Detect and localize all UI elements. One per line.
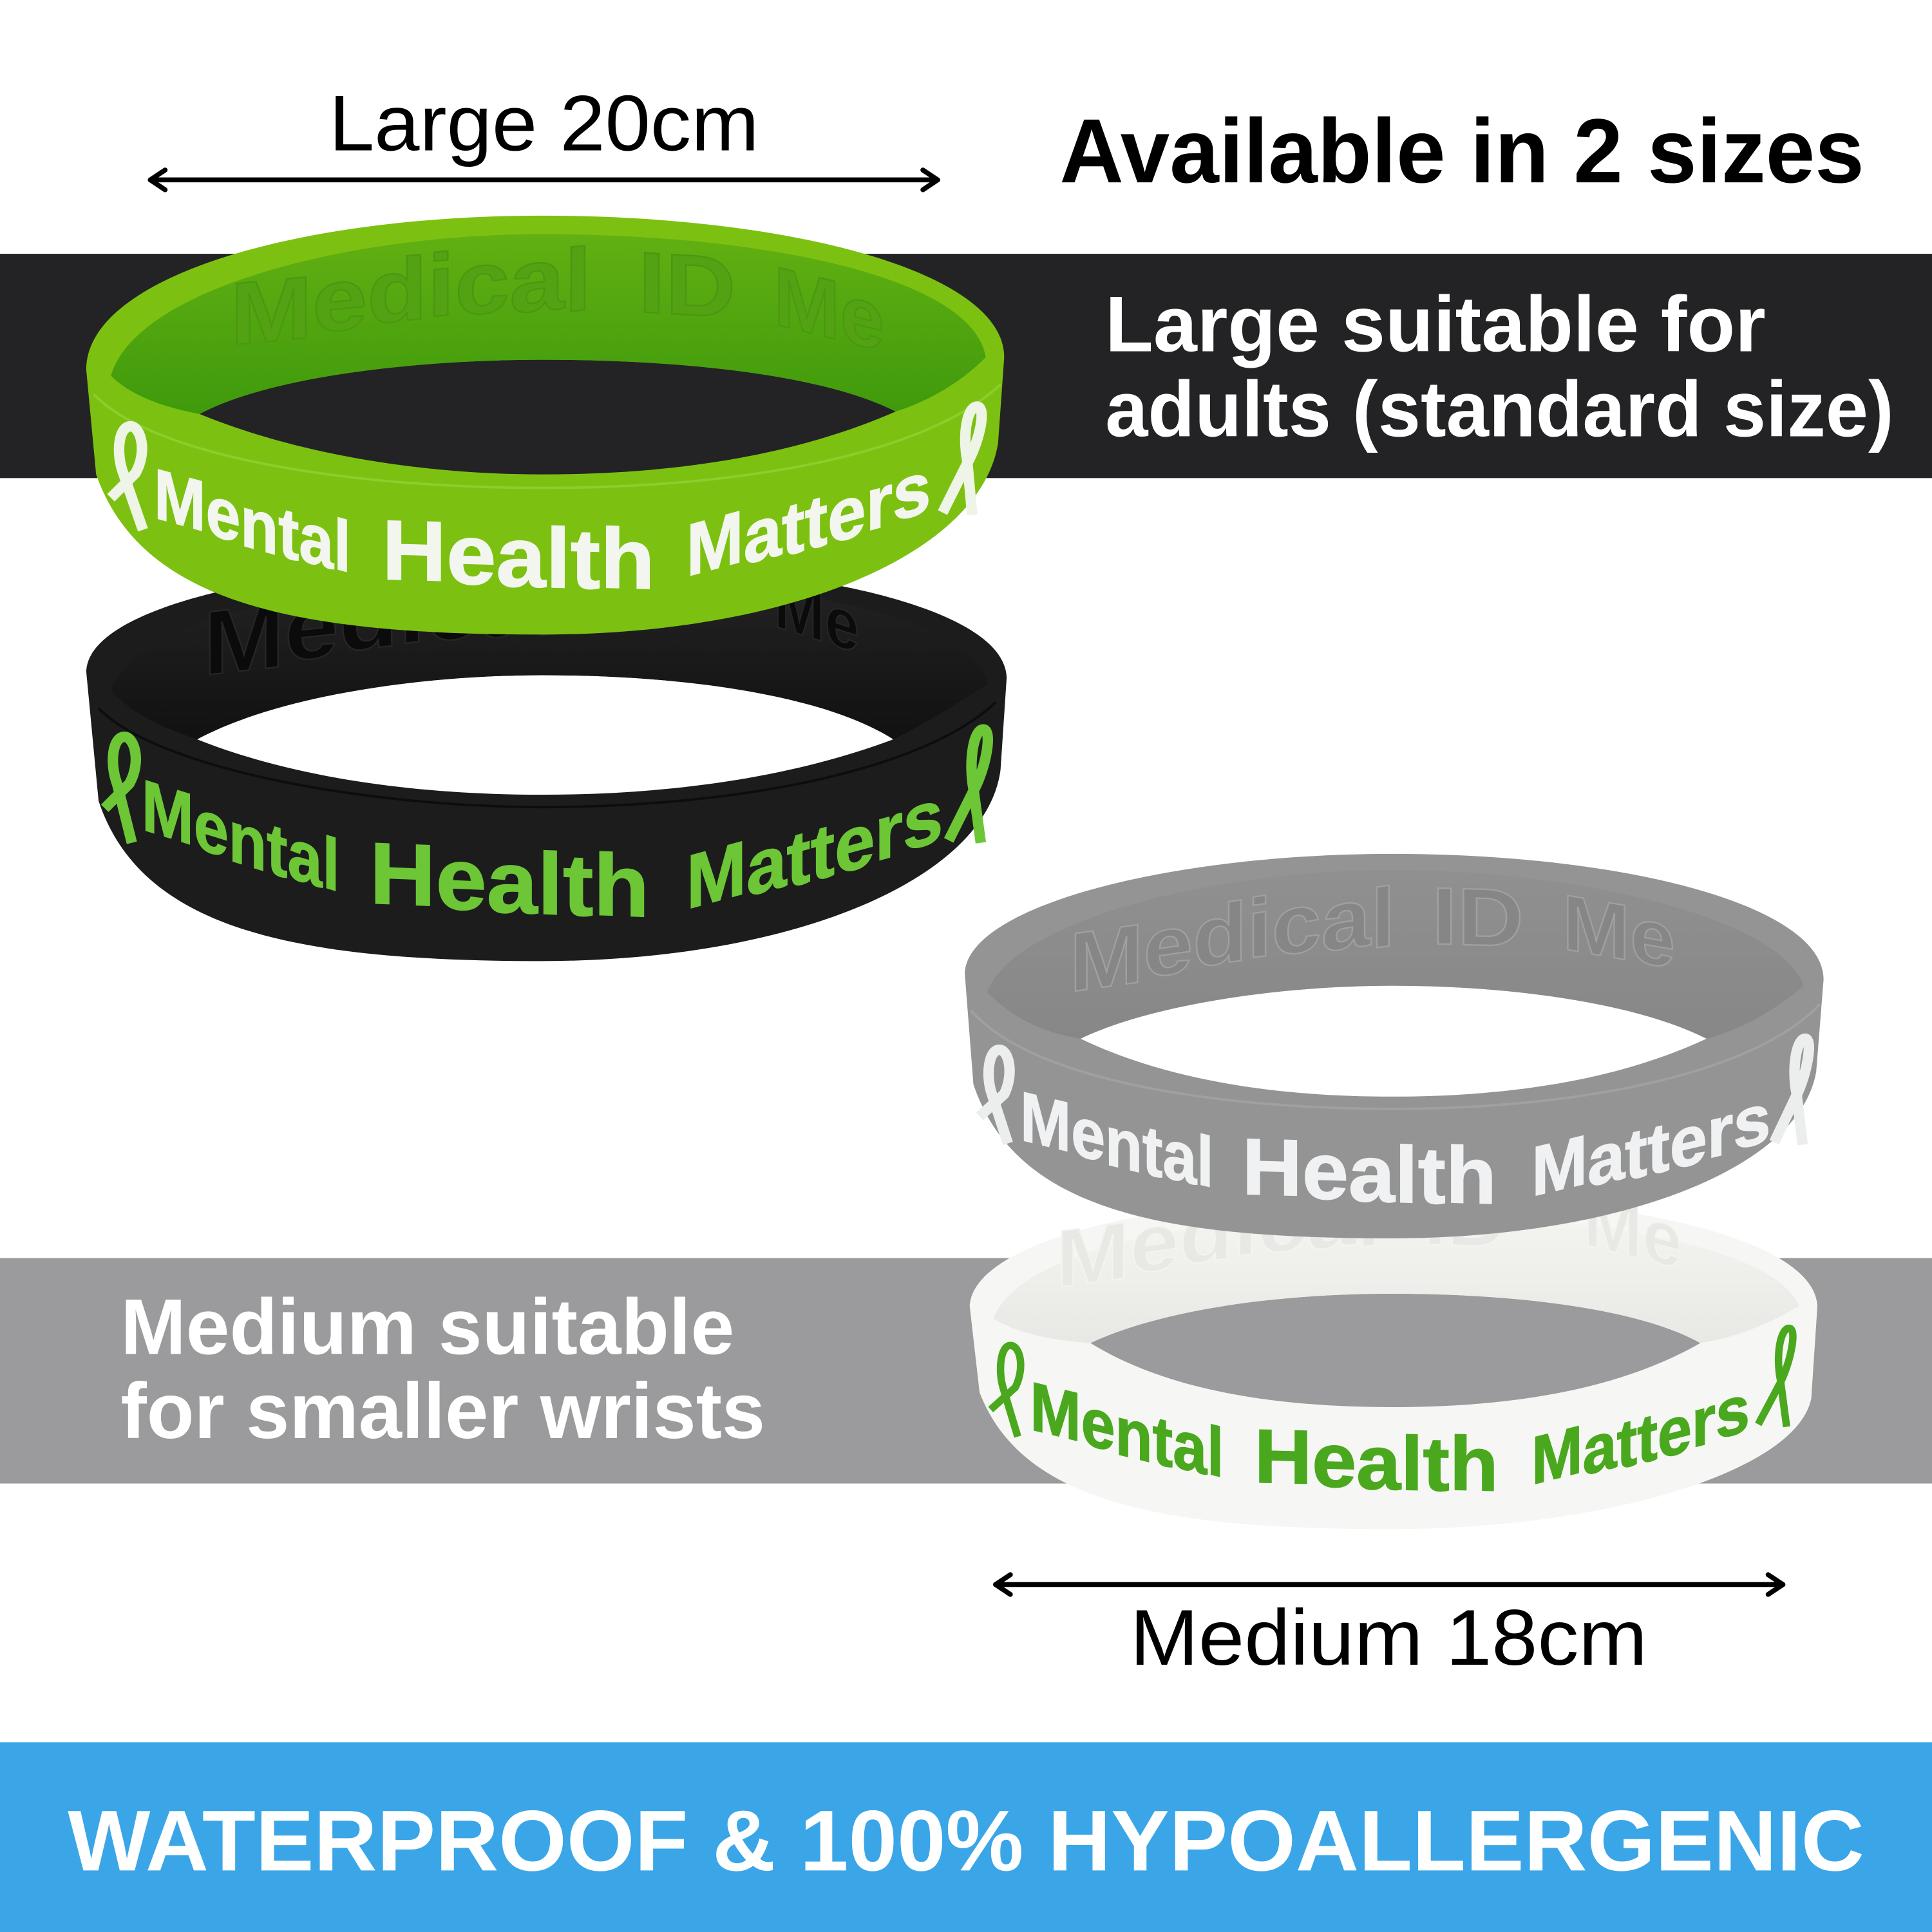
embossed text: Medical ID Me bbox=[204, 544, 859, 695]
icon: ribbon left bbox=[105, 737, 136, 843]
band text: Mental Health Matters bbox=[1020, 1076, 1770, 1222]
band text: Mental Health Matters: Health bbox=[1242, 1121, 1497, 1222]
band text: Mental Health Matters: Mental bbox=[142, 764, 339, 910]
icon: ribbon left bbox=[980, 1050, 1010, 1144]
embossed text: Medical ID Me: Me bbox=[774, 249, 884, 369]
arrow: large width bbox=[150, 170, 938, 190]
text block: medium suitable: for smaller wrists bbox=[120, 1367, 765, 1455]
band text: Mental Health Matters: Matters bbox=[1531, 1076, 1770, 1218]
embossed text: Medical ID Me bbox=[1070, 862, 1675, 1010]
icon: ribbon left bbox=[990, 1345, 1021, 1437]
band text: Mental Health Matters bbox=[142, 764, 943, 937]
band text: Mental Health Matters: Matters bbox=[687, 770, 943, 932]
embossed text: Medical ID Me bbox=[1056, 1164, 1682, 1305]
band text: Mental Health Matters: Health bbox=[1255, 1413, 1499, 1508]
footer text: WATERPROOF & 100% HYPOALLERGENIC bbox=[68, 1793, 1864, 1889]
icon: ribbon right bbox=[949, 730, 988, 843]
band text: Mental Health Matters bbox=[1030, 1367, 1750, 1508]
text block: large suitable: Large suitable for bbox=[1105, 279, 1766, 368]
icon: ribbon right bbox=[943, 406, 981, 515]
wristband: black with green text bbox=[86, 544, 1007, 961]
embossed text: Medical ID Me: Medical bbox=[204, 544, 561, 695]
wristband: white with green text bbox=[970, 1164, 1817, 1529]
band text: Mental Health Matters: Health bbox=[382, 502, 655, 609]
blue footer band bbox=[0, 1742, 1932, 1932]
embossed text: Medical ID Me: Me bbox=[774, 562, 859, 668]
text block: large suitable bbox=[1105, 279, 1894, 453]
embossed text: Medical ID Me bbox=[231, 222, 884, 369]
text block: medium suitable bbox=[120, 1283, 765, 1455]
embossed text: Medical ID Me: ID bbox=[638, 234, 735, 336]
band text: Mental Health Matters: Mental bbox=[1030, 1367, 1224, 1495]
band text: Mental Health Matters: Mental bbox=[154, 453, 351, 591]
arrow: medium width bbox=[996, 1575, 1783, 1595]
heading: large size label: Large 20cm bbox=[329, 79, 759, 167]
embossed text: Medical ID Me: Me bbox=[1584, 1175, 1682, 1285]
embossed text: Medical ID Me: Medical bbox=[231, 222, 592, 364]
embossed text: Medical ID Me: Medical bbox=[1070, 862, 1396, 1010]
text block: large suitable: adults (standard size) bbox=[1105, 365, 1894, 453]
band text: Mental Health Matters: Matters bbox=[1531, 1368, 1750, 1506]
icon: ribbon right bbox=[1774, 1039, 1809, 1144]
title: Available in 2 sizes bbox=[1059, 100, 1864, 202]
wristband: grey with white text bbox=[965, 854, 1824, 1238]
grey band: medium size bbox=[0, 1258, 1932, 1484]
icon: ribbon left bbox=[111, 426, 143, 530]
heading: medium size label: Medium 18cm bbox=[1130, 1593, 1647, 1681]
band text: Mental Health Matters: Mental bbox=[1020, 1076, 1214, 1205]
band text: Mental Health Matters: Matters bbox=[687, 443, 931, 598]
band text: Mental Health Matters: Health bbox=[370, 824, 649, 937]
dark band: large size bbox=[0, 254, 1932, 478]
band text: Mental Health Matters bbox=[154, 443, 931, 609]
embossed text: Medical ID Me: ID bbox=[1432, 870, 1524, 964]
icon: ribbon right bbox=[1758, 1328, 1793, 1427]
text block: medium suitable: Medium suitable bbox=[120, 1283, 734, 1371]
wristband: green with white text bbox=[86, 216, 1004, 634]
embossed text: Medical ID Me: Medical bbox=[1056, 1164, 1381, 1305]
embossed text: Medical ID Me: ID bbox=[1423, 1176, 1507, 1264]
embossed text: Medical ID Me: Me bbox=[1562, 878, 1675, 985]
